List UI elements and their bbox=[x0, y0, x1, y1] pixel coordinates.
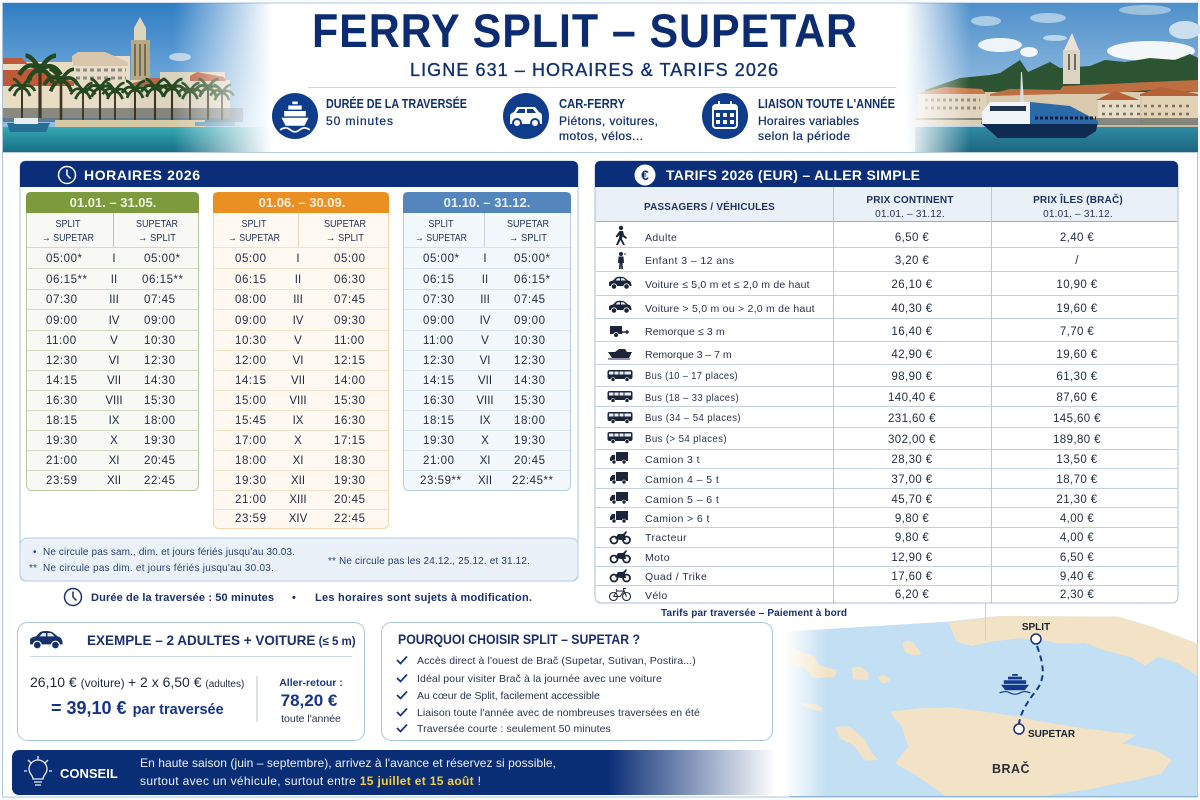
tariff rows: 16,40 € bbox=[891, 326, 933, 338]
info: car-ferry: Piétons, voitures, bbox=[559, 114, 658, 128]
tariff rows: 4,00 € bbox=[1060, 513, 1094, 525]
icon: calendar bbox=[702, 93, 748, 139]
schedule card: 01.10 – 31.12: 20:45 bbox=[514, 455, 546, 467]
tariff rows: 9,80 € bbox=[895, 513, 929, 525]
footnotes: Ne circule pas dim. et jours fériés jusqu'au 30.03. bbox=[43, 563, 274, 574]
tariff rows: 26,10 € bbox=[891, 279, 933, 291]
tariff rows: 21,30 € bbox=[1056, 494, 1098, 506]
map: Split – Brač crossing bbox=[785, 603, 1198, 797]
tariff rows: 17,60 € bbox=[891, 571, 933, 583]
schedule card: 01.06 – 30.09: 14:00 bbox=[334, 375, 366, 387]
panel heading: horaires: HORAIRES 2026 bbox=[84, 167, 200, 183]
schedule card: 01.01 – 31.05: III bbox=[109, 294, 119, 306]
tariff rows: 189,80 € bbox=[1053, 434, 1101, 446]
schedule card: 01.06 – 30.09: 18:00 bbox=[235, 455, 267, 467]
table header: PRIX CONTINENT bbox=[866, 195, 954, 206]
photo: Split waterfront bbox=[3, 3, 273, 152]
duration note: Les horaires sont sujets à modification. bbox=[315, 592, 532, 604]
schedule card: 01.01 – 31.05: 18:00 bbox=[144, 415, 176, 427]
schedule card: 01.06 – 30.09: 23:59 bbox=[235, 513, 267, 525]
tariff rows: 6,50 € bbox=[895, 232, 929, 244]
schedule card: 01.10 – 31.12: 21:00 bbox=[423, 455, 455, 467]
schedule card: 01.10 – 31.12: 12:30 bbox=[514, 355, 546, 367]
schedule card: 01.01 – 31.05 bbox=[26, 192, 199, 490]
tariff rows: Camion 4 – 5 t bbox=[645, 474, 719, 486]
schedule card: 01.10 – 31.12: 01.10. – 31.12. bbox=[444, 195, 530, 210]
footnotes bbox=[20, 538, 578, 581]
tip text bbox=[140, 756, 556, 788]
footnotes: ** bbox=[29, 563, 37, 574]
schedule card: 01.10 – 31.12: 10:30 bbox=[514, 335, 546, 347]
schedule card: 01.01 – 31.05: 12:30 bbox=[46, 355, 78, 367]
schedule card: 01.06 – 30.09: 05:00 bbox=[235, 253, 267, 265]
schedule card: 01.01 – 31.05: VI bbox=[109, 355, 119, 367]
tariff rows: / bbox=[1075, 255, 1079, 267]
tariff rows: Bus (34 – 54 places) bbox=[645, 412, 741, 424]
schedule card: 01.01 – 31.05: IX bbox=[109, 415, 120, 427]
schedule card: 01.01 – 31.05: I bbox=[112, 253, 116, 265]
schedule card: 01.06 – 30.09: 14:15 bbox=[235, 375, 267, 387]
why heading: POURQUOI CHOISIR SPLIT – SUPETAR ? bbox=[398, 631, 640, 647]
schedule card: 01.01 – 31.05: 14:15 bbox=[46, 375, 78, 387]
round trip: Aller-retour : bbox=[279, 677, 343, 689]
tip banner bbox=[12, 750, 776, 795]
title: FERRY SPLIT – SUPETAR bbox=[312, 4, 858, 57]
tariff footer note: Tarifs par traversée – Paiement à bord bbox=[661, 608, 847, 619]
icon: light bulb bbox=[24, 756, 52, 785]
schedule card: 01.06 – 30.09: 15:00 bbox=[235, 395, 267, 407]
panel: tarifs bbox=[595, 161, 1178, 603]
info: year-round: Horaires variables bbox=[758, 114, 859, 128]
schedule card: 01.10 – 31.12: 18:00 bbox=[514, 415, 546, 427]
schedule card: 01.06 – 30.09: 15:45 bbox=[235, 415, 267, 427]
schedule card: 01.10 – 31.12: I bbox=[483, 253, 487, 265]
panel: horaires bbox=[20, 161, 578, 581]
duration note: Durée de la traversée : 50 minutes bbox=[91, 592, 274, 604]
tariff rows: 302,00 € bbox=[888, 434, 936, 446]
tariff rows: 9,80 € bbox=[895, 532, 929, 544]
tariff rows: Bus (18 – 33 places) bbox=[645, 392, 739, 404]
schedule card: 01.10 – 31.12: 11:00 bbox=[423, 335, 454, 347]
panel heading: tarifs: € bbox=[641, 167, 649, 183]
tariff rows: 10,90 € bbox=[1056, 279, 1098, 291]
round trip bbox=[279, 677, 343, 725]
duration note: • bbox=[292, 592, 296, 604]
schedule card: 01.01 – 31.05: XII bbox=[107, 475, 121, 487]
schedule card: 01.06 – 30.09: IV bbox=[293, 315, 304, 327]
schedule card: 01.10 – 31.12: → SPLIT bbox=[509, 232, 548, 244]
schedule card: 01.06 – 30.09: XIV bbox=[289, 513, 308, 525]
schedule card: 01.01 – 31.05: VII bbox=[107, 375, 121, 387]
table header: PASSAGERS / VÉHICULES bbox=[644, 200, 775, 213]
tariff rows: 45,70 € bbox=[891, 494, 933, 506]
schedule card: 01.01 – 31.05: 06:15** bbox=[142, 274, 184, 286]
marker: Split bbox=[1022, 622, 1050, 644]
schedule card: 01.06 – 30.09: 16:30 bbox=[334, 415, 366, 427]
icon: ferry bbox=[272, 93, 318, 139]
schedule card: 01.01 – 31.05: 15:30 bbox=[144, 395, 176, 407]
tariff rows: 61,30 € bbox=[1056, 371, 1098, 383]
tariff rows: Camion 5 – 6 t bbox=[645, 494, 719, 506]
schedule card: 01.01 – 31.05: → SUPETAR bbox=[42, 232, 94, 244]
tariff rows: 37,00 € bbox=[891, 474, 933, 486]
info: car-ferry bbox=[503, 93, 658, 143]
tariff rows: 6,20 € bbox=[895, 589, 929, 601]
schedule card: 01.01 – 31.05: 10:30 bbox=[144, 335, 176, 347]
schedule card: 01.01 – 31.05: XI bbox=[109, 455, 119, 467]
tariff rows: Quad / Trike bbox=[645, 571, 707, 583]
schedule card: 01.01 – 31.05: 14:30 bbox=[144, 375, 176, 387]
table header: 01.01. – 31.12. bbox=[1043, 209, 1113, 220]
schedule card: 01.01 – 31.05: 05:00* bbox=[46, 253, 83, 265]
schedule card: 01.06 – 30.09: → SPLIT bbox=[326, 232, 365, 244]
schedule card: 01.06 – 30.09: 19:30 bbox=[334, 475, 366, 487]
schedule card: 01.10 – 31.12: XI bbox=[480, 455, 490, 467]
tariff rows: 140,40 € bbox=[888, 392, 936, 404]
schedule card: 01.10 – 31.12: 14:15 bbox=[423, 375, 455, 387]
table header: 01.01. – 31.12. bbox=[875, 209, 945, 220]
tip text: En haute saison (juin – septembre), arrivez à l'avance et réservez si possible, bbox=[140, 756, 556, 770]
schedule card: 01.10 – 31.12: XII bbox=[478, 475, 492, 487]
schedule card: 01.10 – 31.12 bbox=[403, 192, 571, 490]
schedule card: 01.06 – 30.09: 18:30 bbox=[334, 455, 366, 467]
tariff rows: Voiture > 5,0 m ou > 2,0 m de haut bbox=[645, 303, 815, 315]
subtitle: LIGNE 631 – HORAIRES & TARIFS 2026 bbox=[410, 60, 778, 80]
tariff rows: 40,30 € bbox=[891, 303, 933, 315]
panel heading: tarifs: TARIFS 2026 (EUR) – ALLER SIMPLE bbox=[666, 167, 920, 183]
schedule card: 01.06 – 30.09: XII bbox=[291, 475, 305, 487]
schedule card: 01.06 – 30.09: 09:30 bbox=[334, 315, 366, 327]
schedule card: 01.01 – 31.05: 07:45 bbox=[144, 294, 176, 306]
panel heading: tarifs bbox=[595, 161, 1178, 187]
schedule card: 01.06 – 30.09: V bbox=[294, 335, 302, 347]
table header: PRIX ÎLES (BRAČ) bbox=[1033, 193, 1123, 206]
duration note bbox=[64, 588, 532, 606]
tariff rows: Camion 3 t bbox=[645, 454, 700, 466]
schedule card: 01.06 – 30.09: III bbox=[293, 294, 303, 306]
schedule card: 01.10 – 31.12: 23:59** bbox=[420, 475, 462, 487]
tariff rows: Adulte bbox=[645, 232, 677, 244]
schedule card: 01.06 – 30.09: VIII bbox=[289, 395, 307, 407]
schedule card: 01.01 – 31.05: 23:59 bbox=[46, 475, 78, 487]
checklist: Liaison toute l'année avec de nombreuses traversées en été bbox=[417, 707, 700, 719]
schedule card: 01.06 – 30.09: → SUPETAR bbox=[228, 232, 280, 244]
schedule card: 01.06 – 30.09: VII bbox=[291, 375, 305, 387]
schedule card: 01.06 – 30.09: 06:15 bbox=[235, 274, 267, 286]
tariff rows: 13,50 € bbox=[1056, 454, 1098, 466]
schedule card: 01.10 – 31.12: II bbox=[482, 274, 488, 286]
footnotes: Ne circule pas sam., dim. et jours fériés jusqu'au 30.03. bbox=[43, 547, 295, 558]
schedule card: 01.06 – 30.09: XI bbox=[293, 455, 303, 467]
schedule card: 01.01 – 31.05: 05:00* bbox=[144, 253, 181, 265]
tariff rows: 42,90 € bbox=[891, 349, 933, 361]
schedule card: 01.01 – 31.05: VIII bbox=[105, 395, 123, 407]
tariff rows: 12,90 € bbox=[891, 552, 933, 564]
tariff rows: 87,60 € bbox=[1056, 392, 1098, 404]
schedule card: 01.01 – 31.05: 09:00 bbox=[144, 315, 176, 327]
schedule card: 01.06 – 30.09: 10:30 bbox=[235, 335, 267, 347]
checklist: Idéal pour visiter Brač à la journée avec une voiture bbox=[417, 673, 662, 685]
tariff rows: Moto bbox=[645, 552, 670, 564]
schedule card: 01.10 – 31.12: 05:00* bbox=[423, 253, 460, 265]
schedule card: 01.01 – 31.05: SUPETAR bbox=[136, 218, 178, 230]
schedule card: 01.10 – 31.12: 09:00 bbox=[423, 315, 455, 327]
schedule card: 01.06 – 30.09: 06:30 bbox=[334, 274, 366, 286]
schedule card: 01.10 – 31.12: 06:15* bbox=[514, 274, 551, 286]
schedule card: 01.01 – 31.05: II bbox=[111, 274, 117, 286]
schedule card: 01.10 – 31.12: 06:15 bbox=[423, 274, 455, 286]
schedule card: 01.10 – 31.12: 14:30 bbox=[514, 375, 546, 387]
schedule card: 01.06 – 30.09: 17:15 bbox=[334, 435, 366, 447]
schedule card: 01.01 – 31.05: 06:15** bbox=[46, 274, 88, 286]
schedule card: 01.01 – 31.05: 12:30 bbox=[144, 355, 176, 367]
info: car-ferry: motos, vélos... bbox=[559, 129, 643, 143]
route: dashed ferry line bbox=[1019, 646, 1043, 724]
schedule card: 01.10 – 31.12: 16:30 bbox=[423, 395, 455, 407]
schedule card: 01.01 – 31.05: 21:00 bbox=[46, 455, 78, 467]
schedule card: 01.10 – 31.12: SUPETAR bbox=[507, 218, 549, 230]
tariff rows: 2,30 € bbox=[1060, 589, 1094, 601]
schedule card: 01.01 – 31.05: 16:30 bbox=[46, 395, 78, 407]
schedule card: 01.01 – 31.05: 20:45 bbox=[144, 455, 176, 467]
marker: Split: SPLIT bbox=[1022, 622, 1050, 633]
schedule card: 01.01 – 31.05: → SPLIT bbox=[138, 232, 177, 244]
price calculation: 26,10 € (voiture) + 2 x 6,50 € (adultes) bbox=[30, 674, 244, 690]
schedule card: 01.10 – 31.12: 18:15 bbox=[423, 415, 455, 427]
footnotes: • bbox=[33, 547, 37, 558]
schedule card: 01.06 – 30.09: 07:45 bbox=[334, 294, 366, 306]
tariff rows: 145,60 € bbox=[1053, 413, 1101, 425]
price total: = 39,10 € par traversée bbox=[51, 698, 224, 718]
schedule card: 01.06 – 30.09: 01.06. – 30.09. bbox=[259, 195, 345, 210]
tip banner: CONSEIL bbox=[60, 766, 118, 781]
example heading: EXEMPLE – 2 ADULTES + VOITURE (≤ 5 m) bbox=[87, 633, 356, 648]
tariff rows: 7,70 € bbox=[1060, 326, 1094, 338]
schedule card: 01.06 – 30.09: XIII bbox=[289, 494, 307, 506]
schedule card: 01.10 – 31.12: → SUPETAR bbox=[415, 232, 467, 244]
schedule card: 01.01 – 31.05: V bbox=[110, 335, 118, 347]
schedule card: 01.06 – 30.09: 20:45 bbox=[334, 494, 366, 506]
marker: Supetar: SUPETAR bbox=[1028, 729, 1076, 740]
schedule card: 01.01 – 31.05: SPLIT bbox=[56, 218, 81, 230]
tariff rows: 231,60 € bbox=[888, 413, 936, 425]
schedule card: 01.10 – 31.12: SPLIT bbox=[428, 218, 454, 230]
tariff rows: 2,40 € bbox=[1060, 232, 1094, 244]
tariff rows: Tracteur bbox=[645, 532, 687, 544]
schedule card: 01.10 – 31.12: III bbox=[480, 294, 490, 306]
info: duration bbox=[272, 93, 467, 139]
tariff rows: 19,60 € bbox=[1056, 303, 1098, 315]
schedule card: 01.10 – 31.12: VIII bbox=[476, 395, 494, 407]
tariff rows: 4,00 € bbox=[1060, 532, 1094, 544]
tariff rows: 19,60 € bbox=[1056, 349, 1098, 361]
icon: car bbox=[503, 93, 549, 139]
schedule card: 01.06 – 30.09: 08:00 bbox=[235, 294, 267, 306]
tariff rows: 6,50 € bbox=[1060, 552, 1094, 564]
schedule card: 01.10 – 31.12: X bbox=[481, 435, 489, 447]
schedule card: 01.10 – 31.12: 07:30 bbox=[423, 294, 455, 306]
footnotes: ** Ne circule pas les 24.12., 25.12. et 31.12. bbox=[328, 556, 530, 567]
schedule card: 01.06 – 30.09: 15:30 bbox=[334, 395, 366, 407]
schedule card: 01.01 – 31.05: 19:30 bbox=[144, 435, 176, 447]
schedule card: 01.01 – 31.05: 11:00 bbox=[46, 335, 77, 347]
schedule card: 01.01 – 31.05: 22:45 bbox=[144, 475, 176, 487]
schedule card: 01.06 – 30.09: IX bbox=[293, 415, 304, 427]
schedule card: 01.06 – 30.09 bbox=[213, 192, 389, 528]
icon: ferry on map bbox=[1000, 674, 1030, 694]
marker: Supetar bbox=[1014, 724, 1076, 740]
schedule card: 01.10 – 31.12: 07:45 bbox=[514, 294, 546, 306]
schedule card: 01.06 – 30.09: 12:15 bbox=[334, 355, 366, 367]
tariff rows: Bus (> 54 places) bbox=[645, 433, 727, 445]
tariff rows: 18,70 € bbox=[1056, 474, 1098, 486]
schedule card: 01.06 – 30.09: 21:00 bbox=[235, 494, 267, 506]
tariff rows: Voiture ≤ 5,0 m et ≤ 2,0 m de haut bbox=[645, 279, 810, 291]
tariff rows: Remorque ≤ 3 m bbox=[645, 326, 725, 338]
schedule card: 01.01 – 31.05: X bbox=[110, 435, 118, 447]
tariff rows: 28,30 € bbox=[891, 454, 933, 466]
tariff rows: Camion > 6 t bbox=[645, 513, 710, 525]
schedule card: 01.10 – 31.12: V bbox=[481, 335, 489, 347]
schedule card: 01.06 – 30.09: SUPETAR bbox=[324, 218, 366, 230]
schedule card: 01.10 – 31.12: VI bbox=[480, 355, 490, 367]
schedule card: 01.06 – 30.09: 09:00 bbox=[235, 315, 267, 327]
tariff rows: Enfant 3 – 12 ans bbox=[645, 255, 734, 267]
label: Brač: BRAČ bbox=[992, 761, 1030, 776]
schedule card: 01.10 – 31.12: 19:30 bbox=[423, 435, 455, 447]
schedule card: 01.06 – 30.09: X bbox=[294, 435, 302, 447]
panel heading: horaires bbox=[20, 161, 578, 187]
schedule card: 01.06 – 30.09: 17:00 bbox=[235, 435, 267, 447]
checklist: Traversée courte : seulement 50 minutes bbox=[417, 723, 611, 735]
schedule card: 01.06 – 30.09: 19:30 bbox=[235, 475, 267, 487]
schedule card: 01.06 – 30.09: 22:45 bbox=[334, 513, 366, 525]
panel: why choose bbox=[382, 622, 772, 740]
schedule card: 01.06 – 30.09: 05:00 bbox=[334, 253, 366, 265]
schedule card: 01.06 – 30.09: 12:00 bbox=[235, 355, 267, 367]
checklist: Accès direct à l'ouest de Brač (Supetar, Sutivan, Postira...) bbox=[417, 655, 696, 667]
info: duration: DURÉE DE LA TRAVERSÉE bbox=[326, 96, 467, 111]
schedule card: 01.06 – 30.09: VI bbox=[293, 355, 303, 367]
checklist bbox=[397, 655, 700, 735]
schedule card: 01.10 – 31.12: IX bbox=[480, 415, 491, 427]
schedule card: 01.06 – 30.09: II bbox=[295, 274, 301, 286]
schedule card: 01.06 – 30.09: I bbox=[296, 253, 300, 265]
panel: example bbox=[18, 622, 364, 740]
schedule card: 01.01 – 31.05: 07:30 bbox=[46, 294, 78, 306]
tariff rows: Vélo bbox=[645, 590, 668, 602]
info: year-round bbox=[702, 93, 895, 143]
schedule card: 01.01 – 31.05: 18:15 bbox=[46, 415, 78, 427]
tariff rows: Bus (10 – 17 places) bbox=[645, 370, 738, 382]
icon: car bbox=[30, 631, 63, 649]
schedule card: 01.10 – 31.12: 12:30 bbox=[423, 355, 455, 367]
schedule card: 01.01 – 31.05: 01.01. – 31.05. bbox=[70, 195, 156, 210]
info: year-round: LIAISON TOUTE L'ANNÉE bbox=[758, 96, 895, 111]
tariff rows: Remorque 3 – 7 m bbox=[645, 349, 732, 361]
tariff rows: 3,20 € bbox=[895, 255, 929, 267]
round trip: toute l'année bbox=[281, 713, 341, 725]
schedule card: 01.10 – 31.12: VII bbox=[478, 375, 492, 387]
schedule card: 01.10 – 31.12: 15:30 bbox=[514, 395, 546, 407]
info: duration: 50 minutes bbox=[326, 114, 393, 128]
schedule card: 01.10 – 31.12: 05:00* bbox=[514, 253, 551, 265]
schedule card: 01.06 – 30.09: 11:00 bbox=[334, 335, 365, 347]
info: year-round: selon la période bbox=[758, 129, 850, 143]
schedule card: 01.01 – 31.05: 09:00 bbox=[46, 315, 78, 327]
schedule card: 01.10 – 31.12: 09:00 bbox=[514, 315, 546, 327]
schedule card: 01.06 – 30.09: SPLIT bbox=[242, 218, 267, 230]
schedule card: 01.01 – 31.05: 19:30 bbox=[46, 435, 78, 447]
schedule card: 01.10 – 31.12: IV bbox=[480, 315, 491, 327]
checklist: Au cœur de Split, facilement accessible bbox=[417, 690, 600, 702]
schedule card: 01.01 – 31.05: IV bbox=[109, 315, 120, 327]
schedule card: 01.10 – 31.12: 22:45** bbox=[512, 475, 554, 487]
info: car-ferry: CAR-FERRY bbox=[559, 97, 626, 111]
photo: Supetar harbour with ferry bbox=[905, 3, 1200, 152]
tip text: surtout avec un véhicule, surtout entre 15 juillet et 15 août ! bbox=[140, 774, 481, 788]
tariff rows: 9,40 € bbox=[1060, 571, 1094, 583]
tariff rows: 98,90 € bbox=[891, 371, 933, 383]
schedule card: 01.10 – 31.12: 19:30 bbox=[514, 435, 546, 447]
round trip: 78,20 € bbox=[281, 691, 338, 710]
tariff rows bbox=[608, 226, 1101, 602]
table header bbox=[596, 187, 1178, 221]
